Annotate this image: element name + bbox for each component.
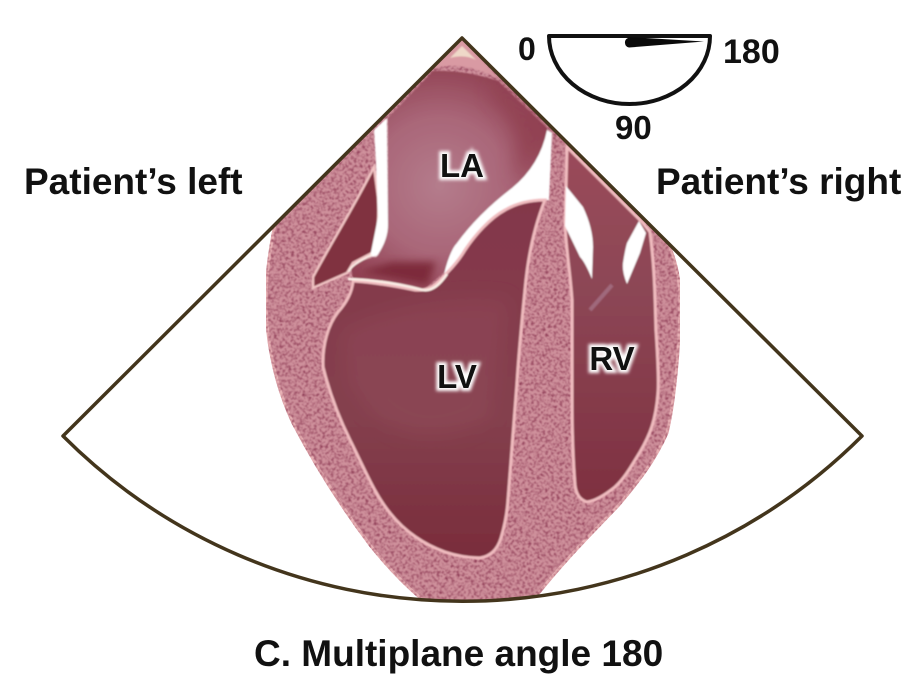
chamber label: LA: LA bbox=[440, 147, 484, 184]
left atrial appendage chamber bbox=[313, 167, 378, 288]
caption: C. Multiplane angle 180 bbox=[254, 633, 663, 674]
dial label 90: 90 bbox=[615, 109, 652, 146]
dial label 0: 0 bbox=[518, 31, 536, 67]
label: patient's left: Patient’s left bbox=[24, 161, 243, 202]
semicircle dial bbox=[549, 36, 710, 104]
LA floor shading bbox=[360, 262, 436, 286]
chamber label: LV: LV bbox=[437, 358, 477, 395]
sector background bbox=[63, 38, 862, 601]
label: patient's right: Patient’s right bbox=[656, 161, 901, 202]
sector outline bbox=[63, 38, 862, 601]
chamber label: LV: LV bbox=[437, 358, 477, 395]
tricuspid leaflet right bbox=[623, 221, 646, 284]
chamber label: LA: LA bbox=[440, 147, 484, 184]
apex cap bbox=[436, 41, 498, 79]
apex highlight bbox=[450, 46, 476, 60]
chamber label: RV: RV bbox=[589, 340, 635, 377]
dial label 180: 180 bbox=[723, 33, 780, 71]
tricuspid leaflet left bbox=[565, 186, 593, 279]
white gap left of LA bbox=[370, 118, 388, 257]
LV mitral leaflet line bbox=[348, 274, 447, 290]
softened chamber artwork bbox=[313, 38, 658, 558]
LA chamber bbox=[350, 71, 547, 290]
heart muscle wall bbox=[266, 40, 680, 604]
chamber label: RV: RV bbox=[589, 340, 635, 377]
right ventricle chamber bbox=[565, 147, 658, 502]
upper mitral leaflet line bbox=[349, 255, 372, 272]
left atrium bbox=[350, 71, 547, 290]
LV inner shading bbox=[340, 298, 510, 438]
RV papillary streak bbox=[590, 285, 612, 310]
heart illustration bbox=[266, 38, 680, 604]
white gap between LA and LV bbox=[444, 130, 552, 274]
needle at 180 degrees bbox=[625, 37, 704, 48]
multiplane angle indicator bbox=[518, 31, 780, 146]
LA upper edge shading bbox=[490, 81, 547, 180]
left ventricle chamber bbox=[323, 200, 545, 558]
